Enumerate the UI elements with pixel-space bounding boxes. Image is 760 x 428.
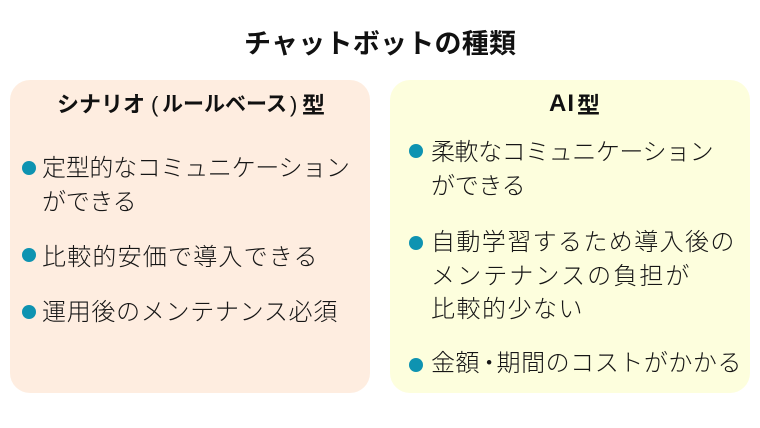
bullet text: ができる [431, 172, 525, 200]
bullet: flexible communication [409, 139, 713, 200]
bullet: fixed-form communication [22, 155, 350, 216]
bullet text [431, 139, 713, 200]
bullet dot [22, 248, 36, 262]
bullet dot [22, 305, 36, 319]
bullet: self-learning, low maintenance [409, 229, 736, 323]
panel: AI type [390, 80, 750, 393]
bullet dot [409, 144, 423, 158]
bullet text: 定型的なコミュニケーション [42, 155, 350, 182]
heading: scenario type [57, 92, 325, 118]
heading: AI type: 型 [577, 92, 600, 118]
heading: scenario type: シナリオ [57, 92, 145, 117]
bullet text [431, 229, 736, 323]
bullet dot [409, 358, 423, 372]
heading: AI type: AI [549, 90, 575, 117]
bullet text: 比較的安価で導入できる [42, 244, 319, 271]
bullet: low cost to introduce [22, 244, 319, 271]
heading: AI type [549, 90, 600, 118]
bullet text: 運用後のメンテナンス必須 [42, 299, 338, 326]
bullet: maintenance required [22, 299, 338, 326]
heading: scenario type: 型 [302, 92, 325, 118]
bullet text: 比較的少ない [431, 296, 584, 323]
panel: scenario (rule-based) type [10, 80, 370, 393]
heading: scenario type: ( [151, 92, 158, 117]
bullet dot [22, 161, 36, 175]
bullet text: 金額・期間のコストがかかる [431, 350, 742, 377]
bullet text: ができる [42, 188, 136, 216]
bullet text: 自動学習するため導入後の [431, 229, 736, 256]
bullet text [42, 155, 350, 216]
bullet: cost and time [409, 350, 742, 377]
title: チャットボットの種類 [244, 29, 516, 59]
bullet text: 柔軟なコミュニケーション [431, 139, 713, 166]
heading: scenario type: ルールベース [162, 93, 287, 116]
bullet text: メンテナンスの負担が [431, 262, 692, 290]
heading: scenario type: ) [290, 92, 297, 117]
bullet dot [409, 236, 423, 250]
